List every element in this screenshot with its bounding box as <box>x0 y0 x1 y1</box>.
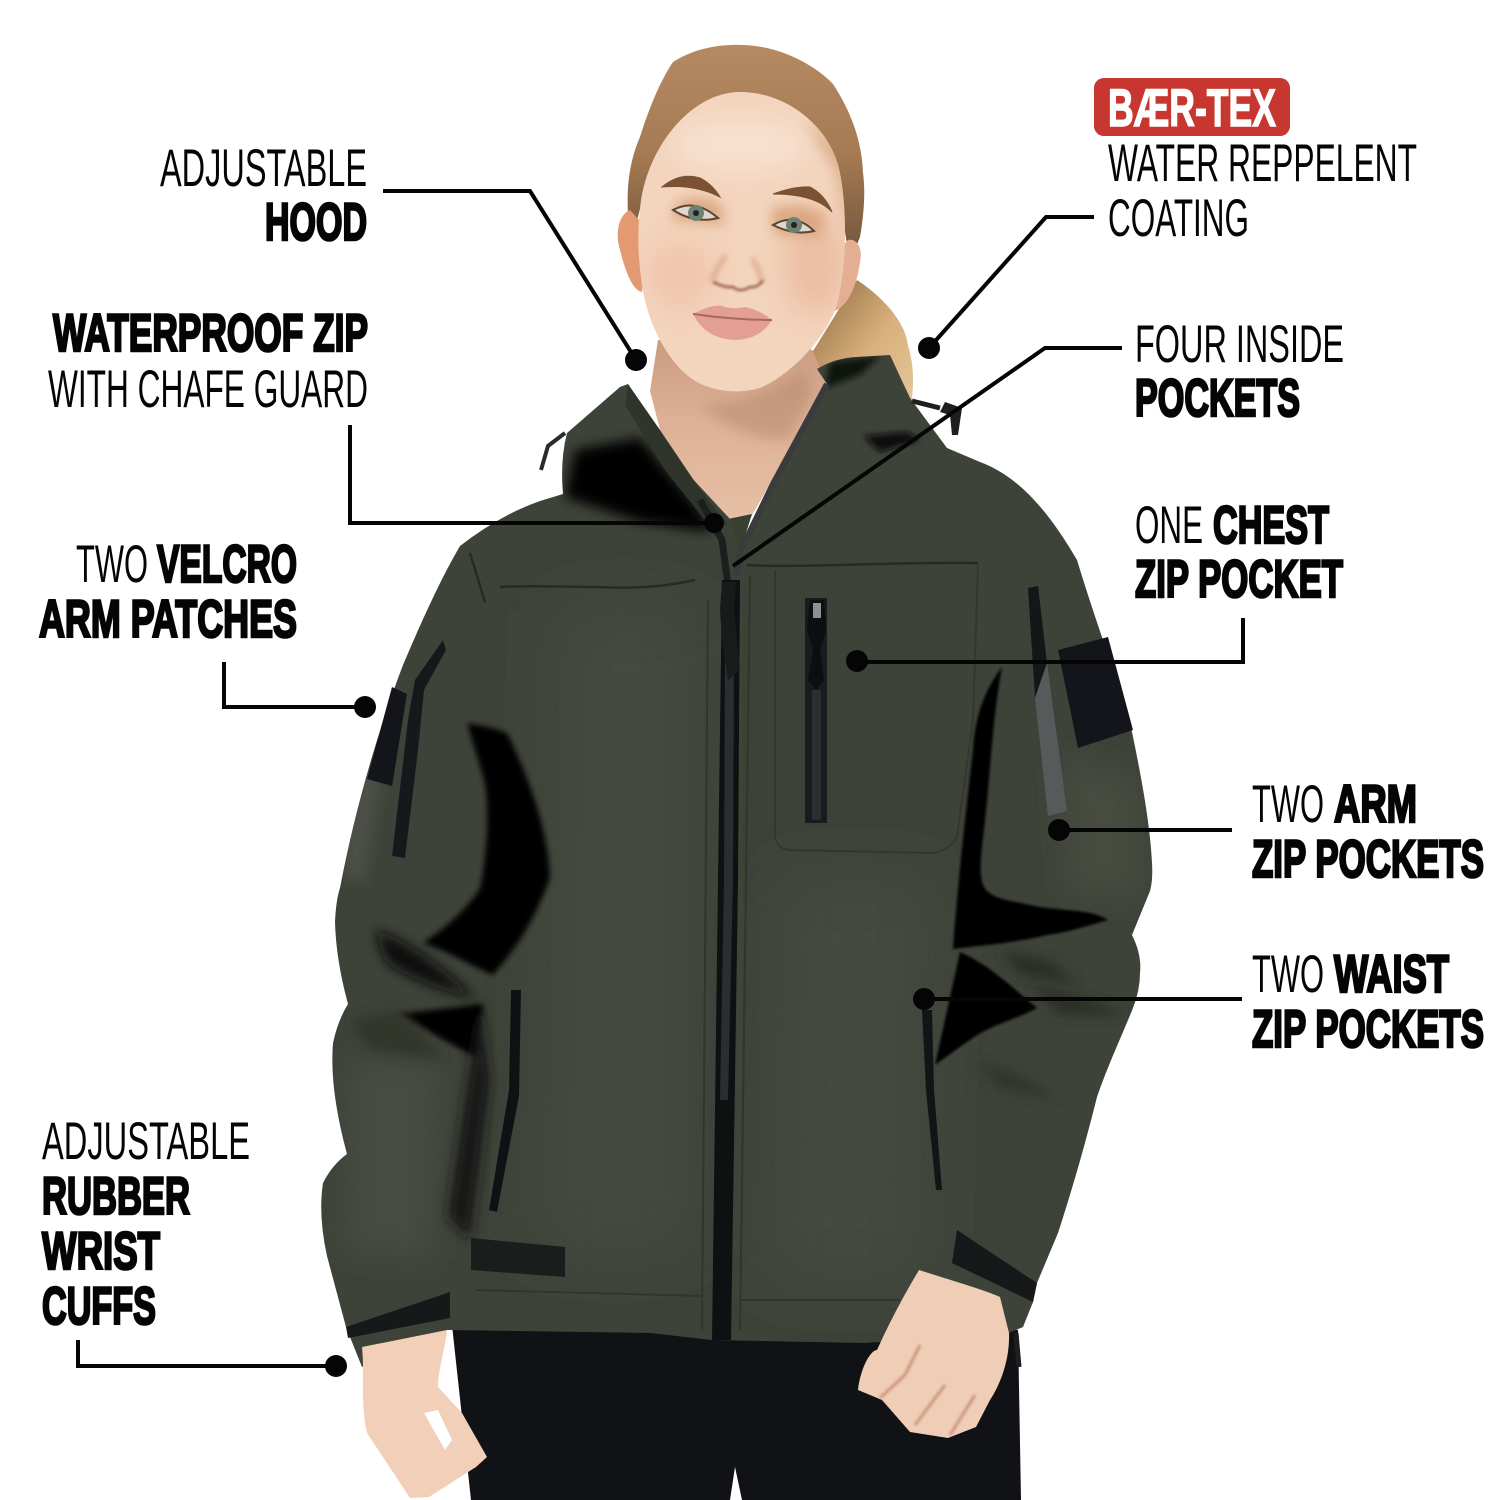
right velcro patch <box>1058 637 1133 748</box>
callout: velcro arm patches: TWO <box>76 535 148 594</box>
face shading <box>648 115 850 315</box>
main zip pull <box>720 582 740 680</box>
callout: waterproof zip: WITH CHAFE GUARD <box>48 360 368 419</box>
hood drawstring left <box>541 433 565 470</box>
callout: chest zip pocket: ONE <box>1135 496 1203 555</box>
hair <box>628 45 864 262</box>
main zip <box>712 580 740 1340</box>
callout: rubber wrist cuffs: CUFFS <box>42 1277 156 1336</box>
callout: rubber wrist cuffs: ADJUSTABLE <box>42 1112 250 1171</box>
face <box>638 92 845 391</box>
callout: waterproof zip: WATERPROOF ZIP <box>53 304 368 363</box>
eyes <box>673 206 718 220</box>
callout: waist zip pockets <box>913 945 1484 1059</box>
callout: arm zip pockets: ARM <box>1334 775 1417 834</box>
ponytail <box>813 280 913 410</box>
black hood shadow <box>565 438 712 532</box>
right cuff strap <box>952 1230 1037 1302</box>
right sleeve zip <box>1028 586 1047 698</box>
eyebrows <box>662 176 720 197</box>
callout: rubber wrist cuffs: RUBBER <box>42 1167 190 1226</box>
underarm left <box>423 723 550 975</box>
left cuff strap <box>346 1292 450 1338</box>
logo patch <box>471 1238 565 1277</box>
shoulder seams <box>470 553 978 602</box>
callout: velcro arm patches: ARM PATCHES <box>39 590 297 649</box>
callout: velcro arm patches <box>39 535 376 718</box>
inner zip tape <box>736 384 827 575</box>
callout: chest zip pocket: CHEST <box>1213 496 1329 555</box>
left ear <box>618 210 648 292</box>
chest pocket seam <box>775 565 978 853</box>
callout: baer-tex water repellent coating: COATING <box>1108 189 1249 248</box>
pants <box>452 1325 1021 1500</box>
callout: waist zip pockets: WAIST <box>1334 945 1449 1004</box>
sleeve folds right <box>1038 987 1116 1018</box>
callout: four inside pockets: FOUR INSIDE <box>1135 315 1344 374</box>
waist zip left <box>489 990 521 1212</box>
neck shadow <box>700 370 812 440</box>
right ear <box>830 240 861 312</box>
callout: adjustable hood: ADJUSTABLE <box>160 139 367 198</box>
callout: chest zip pocket: ZIP POCKET <box>1135 550 1343 609</box>
left hand <box>362 1330 487 1498</box>
collar flap <box>625 384 728 525</box>
hem drawcord <box>1016 1333 1019 1367</box>
finger shadows <box>880 1345 975 1435</box>
jacket shading <box>340 356 1140 1280</box>
waist zip right <box>922 1010 942 1190</box>
gap between fingers <box>424 1410 452 1450</box>
chest zip pocket <box>805 598 827 823</box>
neck <box>650 340 827 545</box>
callout: arm zip pockets <box>1048 775 1484 889</box>
right hand <box>858 1270 1009 1438</box>
jacket body <box>321 355 1152 1367</box>
callout: chest zip pocket <box>846 496 1343 672</box>
callout: rubber wrist cuffs <box>42 1112 347 1377</box>
nose <box>712 255 762 282</box>
callout: baer-tex water repellent coating <box>918 78 1417 359</box>
callout: waist zip pockets: TWO <box>1252 945 1324 1004</box>
photo: woman wearing jacket <box>321 45 1152 1500</box>
callout: arm zip pockets: TWO <box>1252 775 1324 834</box>
callout: velcro arm patches: VELCRO <box>157 535 297 594</box>
placket stitching <box>476 575 900 1330</box>
left sleeve zip <box>392 640 446 858</box>
underarm right <box>953 667 1108 949</box>
callout: adjustable hood: HOOD <box>265 193 367 252</box>
callout: four inside pockets: POCKETS <box>1135 369 1300 428</box>
hood drawstring right <box>912 401 940 408</box>
chest zip pull <box>807 600 826 690</box>
callout: adjustable hood <box>160 139 647 371</box>
lips <box>693 306 772 340</box>
t-shirt <box>728 514 752 552</box>
sleeve folds left <box>375 930 477 999</box>
callout: baer-tex water repellent coating: BÆR-TEX <box>1108 79 1276 138</box>
callout: four inside pockets <box>733 315 1344 566</box>
left velcro patch <box>367 687 407 786</box>
callout: waterproof zip <box>48 304 724 533</box>
callout: rubber wrist cuffs: WRIST <box>42 1222 160 1281</box>
